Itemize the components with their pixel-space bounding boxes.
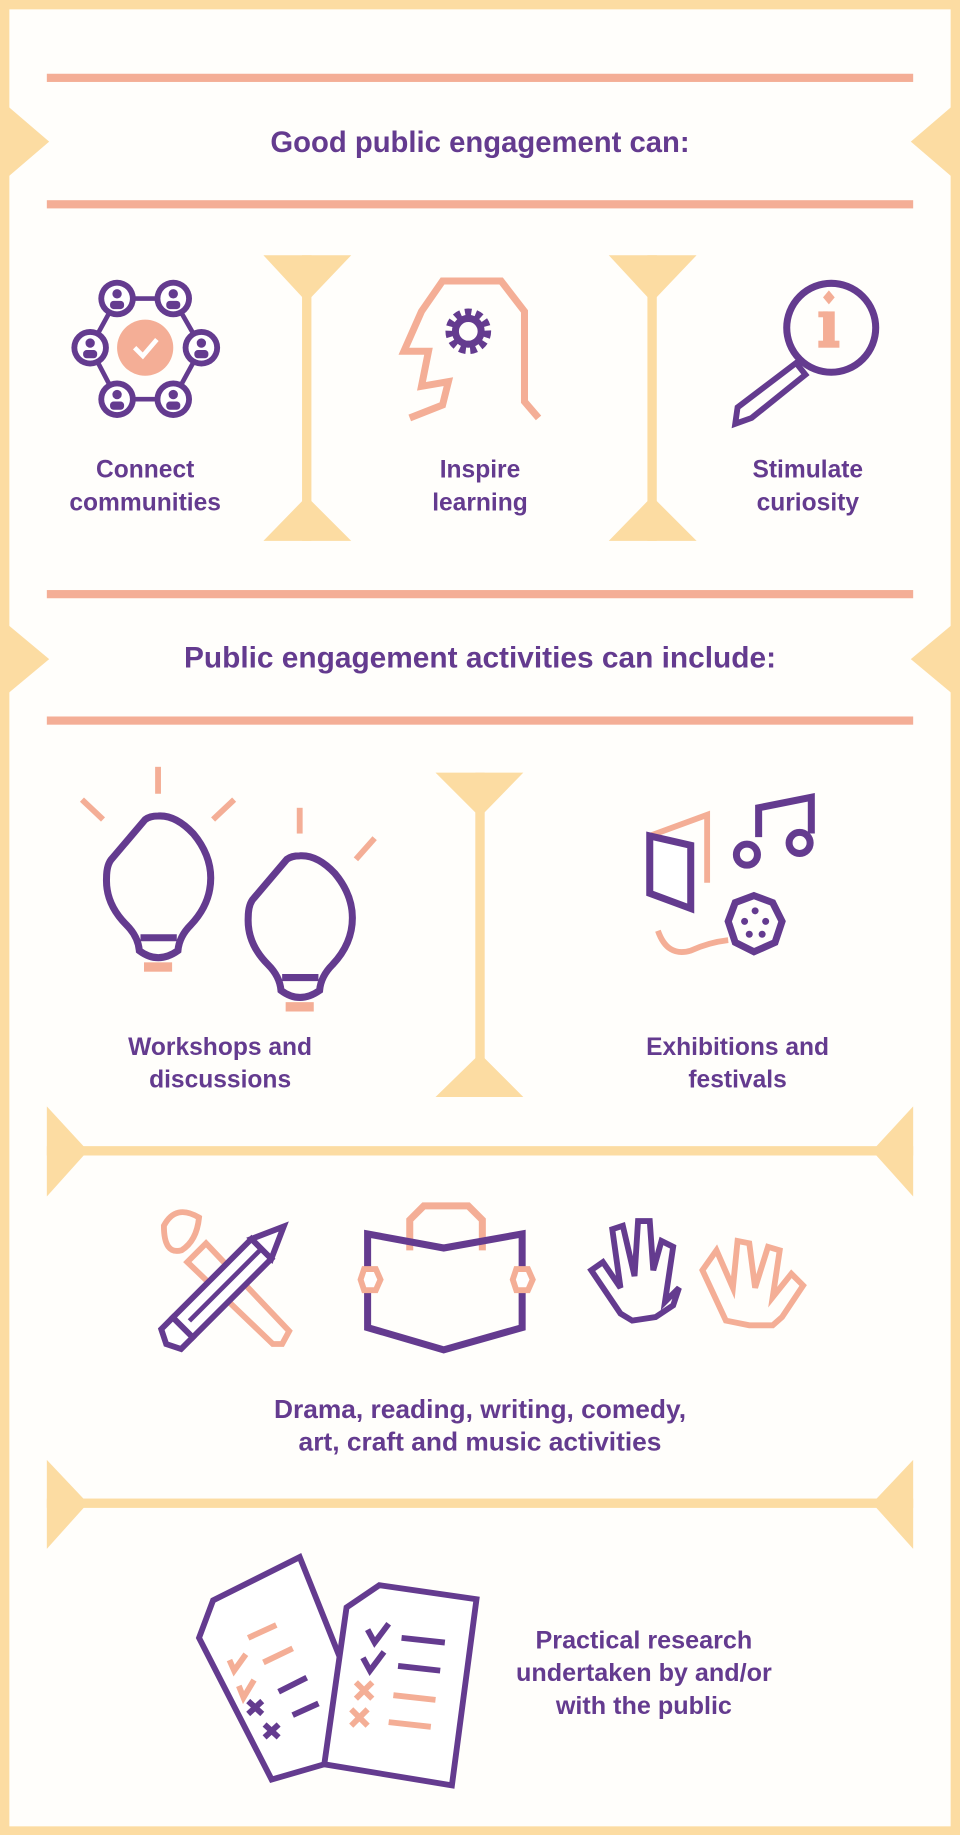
label: inspire learning: Inspire	[440, 457, 520, 484]
header band 1	[0, 74, 960, 208]
label: practical research: undertaken by and/or	[516, 1659, 772, 1687]
divider 4	[47, 1460, 913, 1549]
label: workshops: Workshops and	[128, 1034, 312, 1061]
label: practical research: with the public	[555, 1692, 732, 1720]
label: connect communities: communities	[69, 489, 221, 516]
divider 3	[47, 1106, 913, 1196]
label: drama reading writing: Drama, reading, writing, comedy,	[274, 1394, 686, 1424]
label: inspire learning: learning	[432, 489, 528, 516]
label: exhibitions: Exhibitions and	[646, 1034, 829, 1061]
hourglass divider 2	[609, 255, 697, 541]
icon: magnifier with info	[735, 283, 876, 424]
title: activities: Public engagement activities can include:	[184, 641, 776, 674]
hourglass divider 1	[263, 255, 351, 541]
label: workshops: discussions	[149, 1067, 291, 1094]
label: connect communities: Connect	[96, 457, 194, 484]
icon: checklists	[199, 1557, 476, 1785]
icon: book reader	[361, 1206, 533, 1350]
icon: light bulbs	[82, 767, 375, 1012]
icon: head with gear	[404, 281, 539, 418]
icon: exhibitions and festivals	[650, 797, 811, 952]
title: good public engagement: Good public engagement can:	[270, 127, 690, 159]
icon: connected communities	[71, 280, 220, 418]
label: practical research: Practical research	[536, 1626, 752, 1654]
label: drama reading writing: art, craft and music activities	[299, 1427, 661, 1457]
hourglass divider 3	[436, 773, 523, 1097]
label: stimulate curiosity: Stimulate	[752, 457, 863, 484]
icon: brush and pencil	[156, 1212, 294, 1354]
label: stimulate curiosity: curiosity	[757, 489, 859, 516]
icon: hands	[591, 1221, 803, 1325]
label: exhibitions: festivals	[688, 1067, 787, 1094]
header band 2	[0, 590, 960, 725]
